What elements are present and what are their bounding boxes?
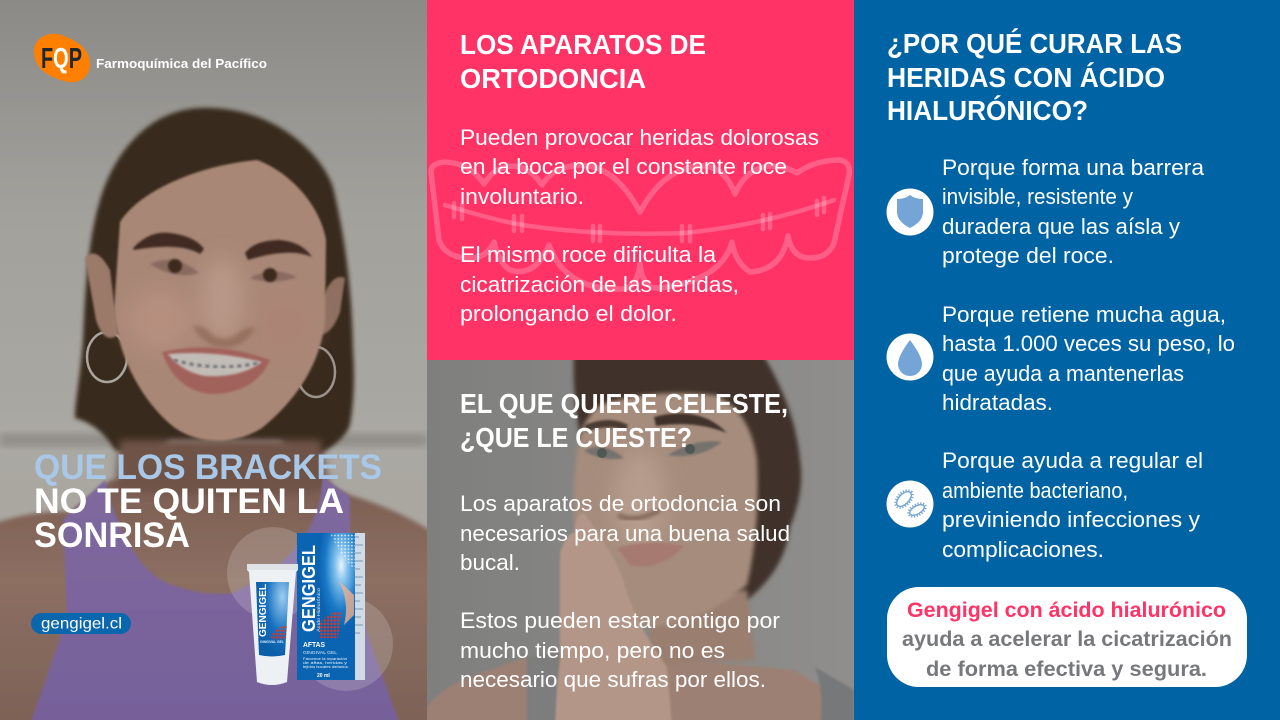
text: irritation explanation: Pueden provocar heridas dolorosas bbox=[460, 125, 819, 150]
icon: FQP logo blob bbox=[34, 34, 90, 82]
text: irritation explanation: en la boca por el constante roce bbox=[460, 154, 787, 179]
text: barrier reason: duradera que las aísla y bbox=[942, 214, 1181, 239]
heading: los aparatos: LOS APARATOS DE bbox=[460, 29, 706, 60]
heading: los aparatos: ORTODONCIA bbox=[460, 63, 646, 94]
text: braces are necessary: necesario que sufras por ellos. bbox=[460, 667, 766, 692]
text: irritation explanation: prolongando el dolor. bbox=[460, 301, 677, 326]
text: irritation explanation: involuntario. bbox=[460, 184, 584, 209]
text: braces are necessary: Los aparatos de ortodoncia son bbox=[460, 491, 781, 516]
text: water retention reason bbox=[942, 302, 1235, 415]
heading: el que quiere celeste: ¿QUE LE CUESTE? bbox=[460, 422, 692, 453]
panel: smiling girl photo bbox=[0, 0, 437, 720]
heading: por qué curar: HERIDAS CON ÁCIDO bbox=[887, 62, 1165, 93]
text: barrier reason: Porque forma una barrera bbox=[942, 155, 1204, 180]
product: Gengigel box: 20 ml bbox=[317, 673, 330, 679]
text: bacterial environment reason: ambiente bacteriano, bbox=[942, 478, 1128, 503]
text: water retention reason: que ayuda a mantenerlas bbox=[942, 361, 1184, 386]
text: barrier reason bbox=[942, 155, 1204, 268]
text: water retention reason: hasta 1.000 veces su peso, lo bbox=[942, 331, 1235, 356]
text: barrier reason: protege del roce. bbox=[942, 243, 1114, 268]
heading: los aparatos bbox=[460, 29, 706, 94]
icon: water drop bbox=[886, 334, 934, 380]
headline bbox=[34, 448, 382, 555]
panel: blue background bbox=[854, 0, 1280, 720]
product: Gengigel box: Ácido Hialurónico bbox=[315, 587, 321, 632]
product: Gengigel box bbox=[297, 533, 365, 680]
panel: pink background bbox=[427, 0, 854, 360]
text: bacterial environment reason: Porque ayuda a regular el bbox=[942, 448, 1203, 473]
product: Gengigel box: GINGIVAL GEL bbox=[303, 650, 338, 655]
heading: por qué curar bbox=[887, 28, 1182, 126]
text: irritation explanation: El mismo roce dificulta la bbox=[460, 242, 716, 267]
text: barrier reason: invisible, resistente y bbox=[942, 184, 1134, 209]
text: bacterial environment reason bbox=[942, 448, 1203, 562]
text: irritation explanation: cicatrización de las heridas, bbox=[460, 272, 739, 297]
text: irritation explanation bbox=[460, 125, 819, 326]
callout: Gengigel con ácido hialurónico bbox=[907, 599, 1226, 622]
icon: FQP logo blob: FQP bbox=[41, 43, 82, 75]
text: braces are necessary: necesarios para una buena salud bbox=[460, 521, 790, 546]
callout: ayuda a acelerar la cicatrización bbox=[902, 628, 1232, 651]
product: Gengigel box: tejidos bucales dañados. bbox=[303, 665, 349, 669]
icon: bacteria bbox=[886, 480, 934, 528]
panel: thoughtful girl photo bbox=[427, 350, 854, 720]
product: Gengigel box: GENGIGEL bbox=[299, 545, 319, 632]
product decorative circles bbox=[227, 527, 393, 691]
product: Gengigel box: AFTAS bbox=[303, 642, 325, 649]
text: braces are necessary: mucho tiempo, pero no es bbox=[460, 638, 725, 663]
text: water retention reason: Porque retiene mucha agua, bbox=[942, 302, 1226, 327]
heading: por qué curar: ¿POR QUÉ CURAR LAS bbox=[887, 28, 1182, 59]
callout bbox=[887, 587, 1247, 687]
headline: QUE LOS BRACKETS bbox=[34, 448, 382, 487]
company name: Farmoquímica del Pacífico bbox=[96, 56, 267, 71]
text: braces are necessary: Estos pueden estar contigo por bbox=[460, 608, 781, 633]
heading: el que quiere celeste bbox=[460, 388, 788, 453]
text: braces are necessary bbox=[460, 491, 790, 692]
callout: de forma efectiva y segura. bbox=[926, 658, 1207, 681]
text: braces are necessary: bucal. bbox=[460, 550, 520, 575]
product: Gengigel tube: GINGIVAL GEL bbox=[260, 640, 284, 644]
heading: el que quiere celeste: EL QUE QUIERE CELESTE, bbox=[460, 388, 788, 419]
text: bacterial environment reason: complicaciones. bbox=[942, 537, 1104, 562]
website pill: gengigel.cl bbox=[41, 616, 122, 632]
product: Gengigel tube: GENGIGEL bbox=[258, 584, 269, 637]
icon: braces outline bbox=[431, 160, 849, 289]
headline: SONRISA bbox=[34, 516, 190, 555]
headline: NO TE QUITEN LA bbox=[34, 482, 344, 521]
product: Gengigel box: Favorece la reparación bbox=[303, 657, 347, 661]
icon: shield bbox=[886, 188, 934, 236]
text: bacterial environment reason: previniendo infecciones y bbox=[942, 507, 1201, 532]
text: water retention reason: hidratadas. bbox=[942, 390, 1053, 415]
product: Gengigel tube bbox=[247, 564, 298, 685]
heading: por qué curar: HIALURÓNICO? bbox=[887, 95, 1088, 126]
product: Gengigel box: de aftas, heridas y bbox=[303, 661, 348, 665]
website pill bbox=[31, 613, 131, 634]
